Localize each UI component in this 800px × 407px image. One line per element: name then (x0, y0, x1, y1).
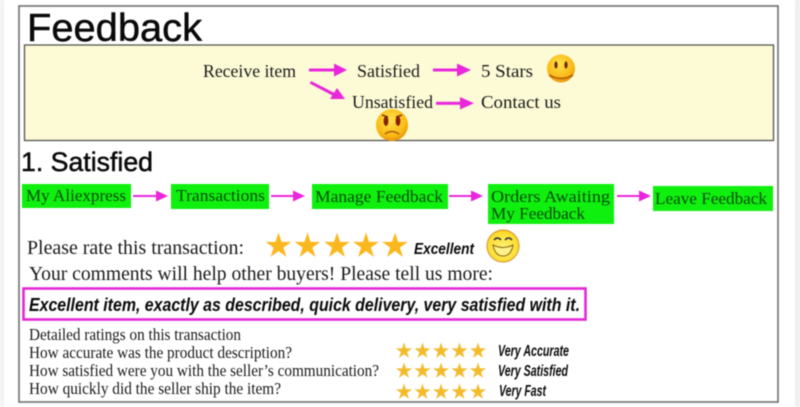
arrow: receive to satisfied (309, 64, 347, 76)
panel: feedback flow (24, 45, 774, 141)
comment box (24, 288, 586, 320)
heading: satisfied: 1. Satisfied (21, 147, 153, 177)
question: communication: How satisfied were you with the seller’s communication? (29, 361, 379, 380)
step: my aliexpress: My Aliexpress (26, 186, 126, 205)
text: unsatisfied: Unsatisfied (352, 92, 433, 112)
step: transactions (171, 184, 269, 209)
label: very fast: Very Fast (499, 383, 546, 400)
text: please rate: Please rate this transaction: (27, 237, 244, 259)
step: manage feedback (312, 184, 448, 209)
arrow: step 3 to 4 (449, 190, 483, 202)
text: 5 stars: 5 Stars (481, 61, 533, 81)
rating stars (266, 232, 408, 257)
accuracy stars (396, 342, 486, 358)
label: very accurate: Very Accurate (498, 343, 569, 360)
arrow: step 4 to 5 (617, 190, 651, 202)
comment box: Excellent item, exactly as described, quick delivery, very satisfied with it. (29, 295, 580, 315)
step: orders awaiting my feedback: My Feedback (491, 204, 586, 223)
arrow: unsatisfied to contact us (436, 97, 474, 110)
icon: laughing face (487, 230, 519, 262)
arrow: receive to unsatisfied (310, 81, 345, 99)
step: leave feedback (653, 186, 773, 211)
question: shipping: How quickly did the seller ship the item? (29, 379, 281, 398)
label: very satisfied: Very Satisfied (498, 363, 569, 380)
arrow: step 2 to 3 (271, 190, 305, 202)
step: manage feedback: Manage Feedback (315, 187, 444, 206)
text: satisfied: Satisfied (357, 61, 420, 81)
icon: frown (376, 109, 408, 141)
communication stars (396, 362, 486, 378)
shipping stars (396, 384, 486, 399)
title: Feedback (27, 7, 203, 50)
label: excellent: Excellent (414, 241, 475, 258)
text: contact us: Contact us (481, 92, 561, 112)
step: leave feedback: Leave Feedback (655, 189, 768, 208)
step: orders awaiting my feedback: Orders Awaiting (491, 187, 610, 206)
arrow: step 1 to 2 (133, 190, 168, 202)
arrow: satisfied to 5 stars (433, 64, 471, 76)
text: receive item: Receive item (203, 61, 296, 81)
detailed ratings heading: Detailed ratings on this transaction (29, 325, 241, 344)
question: accuracy: How accurate was the product description? (29, 343, 292, 362)
text: comments prompt: Your comments will help other buyers! Please tell us more: (29, 263, 493, 285)
step: orders awaiting my feedback (488, 184, 614, 224)
icon: smile (547, 54, 575, 82)
step: transactions: Transactions (176, 186, 265, 205)
